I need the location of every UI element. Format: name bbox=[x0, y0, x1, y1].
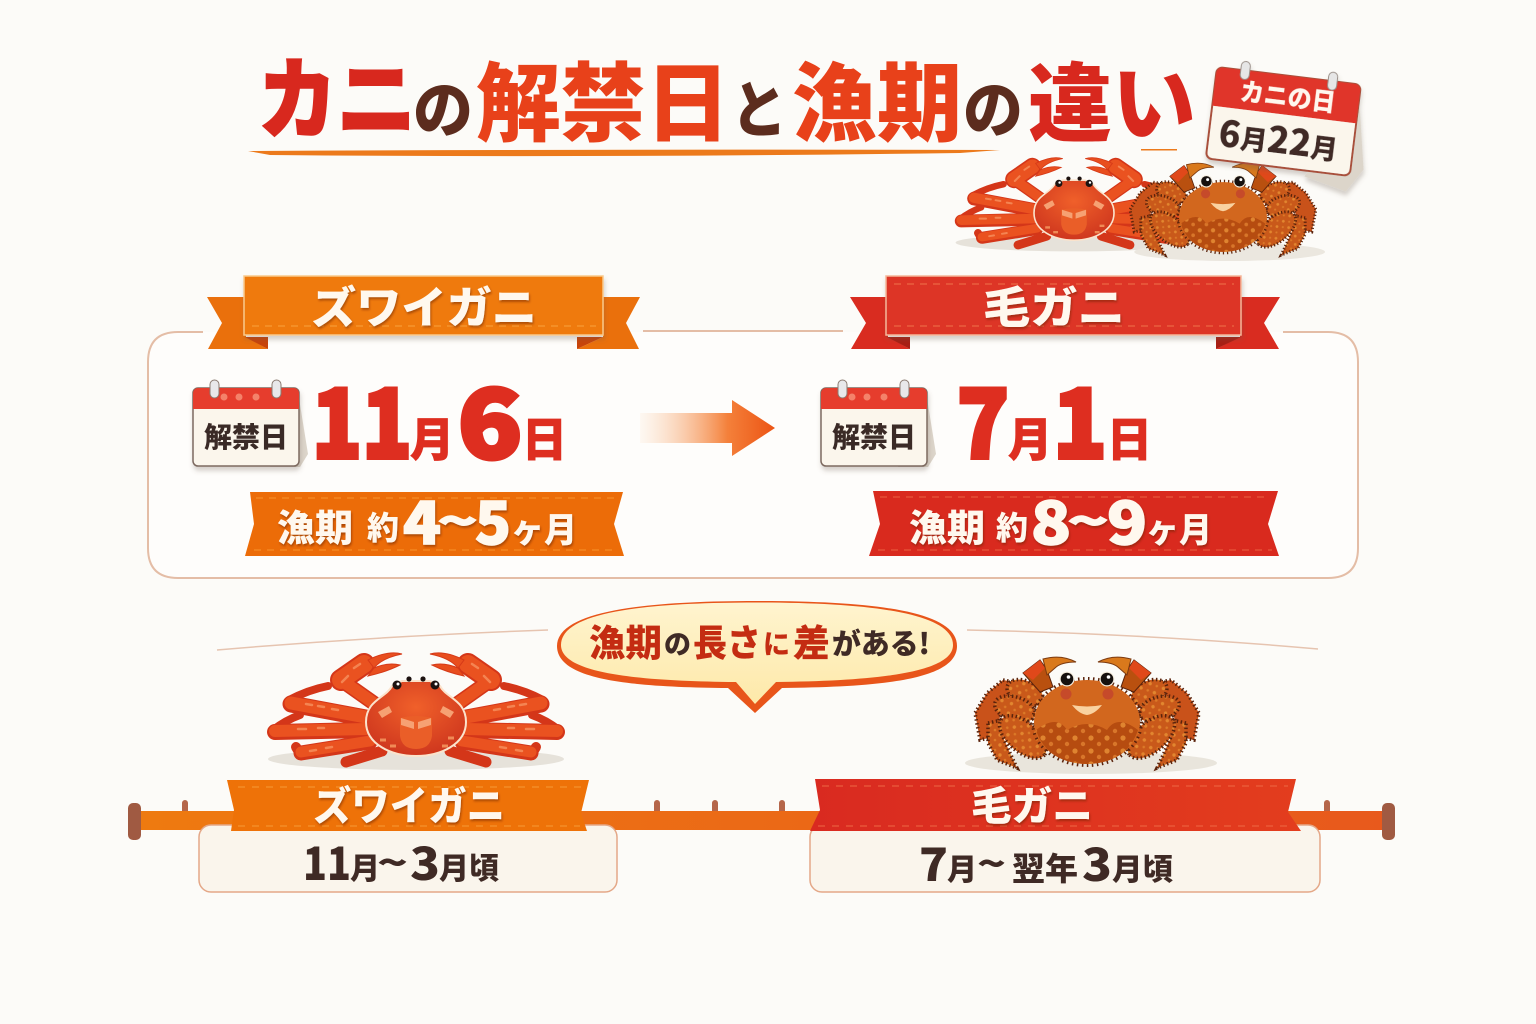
box: snow crab season: 月頃 bbox=[439, 844, 499, 888]
icon: small snow crab bbox=[956, 158, 1192, 251]
ribbon: hairy crab timeline: 毛ガニ bbox=[971, 774, 1093, 832]
band: snow crab season length: ヶ月 bbox=[511, 503, 577, 552]
title: 漁期 bbox=[792, 34, 962, 159]
ribbon: hairy crab heading: 毛ガニ bbox=[983, 272, 1125, 336]
band: snow crab season length bbox=[245, 477, 624, 561]
calendar icon: snow crab opening day bbox=[193, 380, 308, 467]
icon: large hairy crab bbox=[965, 657, 1217, 774]
box: snow crab season: ~ bbox=[377, 835, 408, 887]
box: snow crab season: 11 bbox=[303, 828, 351, 893]
calendar icon: hairy crab opening day bbox=[821, 380, 936, 467]
timeline bar bbox=[128, 803, 1395, 840]
box: hairy crab season: 3 bbox=[1082, 829, 1112, 894]
title: 解禁日 bbox=[476, 34, 730, 159]
ribbon: hairy crab timeline bbox=[810, 774, 1301, 832]
band: snow crab season length: 漁期 bbox=[277, 498, 353, 552]
callout: season length differs bbox=[557, 601, 957, 713]
ribbon: hairy crab heading bbox=[850, 272, 1280, 349]
title: と bbox=[731, 60, 787, 150]
date: July 1: 7 bbox=[957, 350, 1009, 485]
calendar: crab day: 6月22月 bbox=[1216, 105, 1341, 171]
box: snow crab season: 月 bbox=[350, 844, 380, 888]
band: hairy crab season length bbox=[869, 477, 1279, 561]
title bbox=[258, 30, 1196, 159]
title: 違い bbox=[1028, 34, 1196, 159]
band: snow crab season length: ~ bbox=[437, 486, 478, 552]
box: hairy crab season: 月頃 bbox=[1112, 845, 1173, 889]
callout: season length differs: 漁期 bbox=[589, 613, 662, 667]
callout: season length differs: に bbox=[763, 623, 790, 662]
box: hairy crab season: 月 bbox=[947, 845, 977, 889]
date: July 1 bbox=[957, 350, 1152, 485]
date: November 6 bbox=[312, 350, 567, 485]
callout: season length differs: 長さ bbox=[693, 613, 761, 667]
title: の bbox=[413, 60, 473, 150]
icon: large snow crab bbox=[268, 653, 564, 770]
ribbon: snow crab heading: ズワイガニ bbox=[311, 272, 537, 336]
title: カニ bbox=[258, 30, 416, 157]
box: hairy crab season: 翌年 bbox=[1012, 844, 1078, 890]
band: snow crab season length: 約 bbox=[367, 503, 399, 549]
box: hairy crab season: 7 bbox=[919, 829, 948, 894]
date: July 1: 日 bbox=[1107, 404, 1152, 470]
box: hairy crab season bbox=[810, 825, 1320, 894]
divider lines bbox=[217, 630, 1318, 650]
band: hairy crab season length: ~ bbox=[1067, 486, 1109, 552]
band: hairy crab season length: 約 bbox=[996, 503, 1028, 549]
calendar: crab day bbox=[1204, 58, 1375, 193]
date: November 6: 11 bbox=[312, 350, 412, 485]
band: hairy crab season length: ヶ月 bbox=[1146, 503, 1212, 552]
band: snow crab season length: 5 bbox=[475, 477, 511, 561]
date: November 6: 日 bbox=[522, 404, 567, 470]
date: July 1: 月 bbox=[1008, 404, 1052, 470]
title: の bbox=[963, 60, 1023, 150]
box: snow crab season: 3 bbox=[410, 828, 440, 893]
ribbon: snow crab timeline bbox=[227, 774, 589, 832]
ribbon: snow crab heading bbox=[207, 272, 640, 349]
band: hairy crab season length: 漁期 bbox=[909, 498, 985, 552]
calendar icon: snow crab opening day: 解禁日 bbox=[204, 416, 288, 456]
ribbon: snow crab timeline: ズワイガニ bbox=[313, 774, 505, 832]
band: snow crab season length: 4 bbox=[403, 477, 441, 561]
title underline bbox=[248, 149, 1177, 156]
date: November 6: 6 bbox=[458, 350, 522, 485]
band: hairy crab season length: 9 bbox=[1107, 477, 1147, 561]
callout: season length differs: がある! bbox=[832, 621, 930, 663]
date: July 1: 1 bbox=[1053, 350, 1107, 485]
panel: comparison frame bbox=[148, 331, 1358, 578]
date: November 6: 月 bbox=[410, 404, 454, 470]
box: snow crab season bbox=[199, 825, 617, 893]
band: hairy crab season length: 8 bbox=[1031, 477, 1071, 561]
callout: season length differs: 差 bbox=[793, 613, 830, 667]
icon: small hairy crab bbox=[1130, 163, 1325, 261]
arrow bbox=[640, 400, 775, 456]
callout: season length differs: の bbox=[664, 623, 691, 662]
calendar: crab day: カニの日 bbox=[1238, 72, 1338, 120]
calendar icon: hairy crab opening day: 解禁日 bbox=[832, 416, 916, 456]
box: hairy crab season: ~ bbox=[977, 836, 1006, 888]
